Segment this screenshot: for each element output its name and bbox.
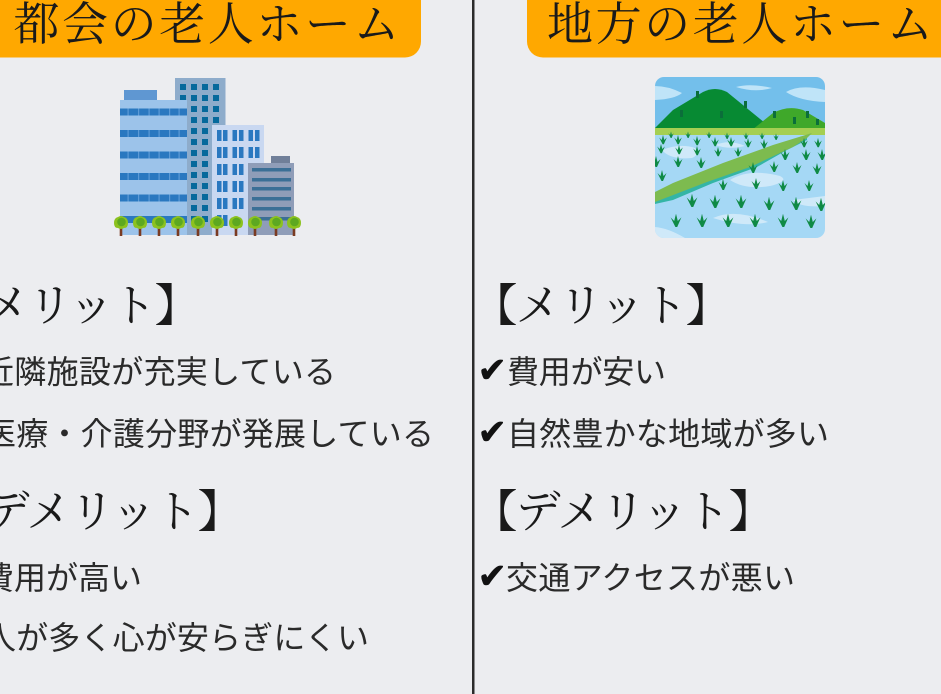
right column: merit item 1: 費用が安い: [507, 354, 666, 390]
right column: merit item 2: 自然豊かな地域が多い: [507, 416, 829, 452]
right column: merits heading: 【メリット】: [472, 281, 730, 331]
right column: demerit item 1: 交通アクセスが悪い: [506, 560, 795, 596]
right column: demerit item 1: ✔: [478, 557, 507, 597]
divider between columns: [472, 0, 474, 694]
heading: rural nursing homes: 地方の老人ホーム: [547, 0, 933, 50]
icon: city buildings: [114, 78, 301, 236]
right column: merit item 1: ✔: [478, 351, 507, 391]
right column: demerits heading: 【デメリット】: [472, 487, 774, 537]
icon: rice paddies and mountains: [652, 77, 826, 238]
heading: urban nursing homes: 都会の老人ホーム: [14, 0, 400, 50]
right column: merit item 2: ✔: [478, 413, 507, 453]
